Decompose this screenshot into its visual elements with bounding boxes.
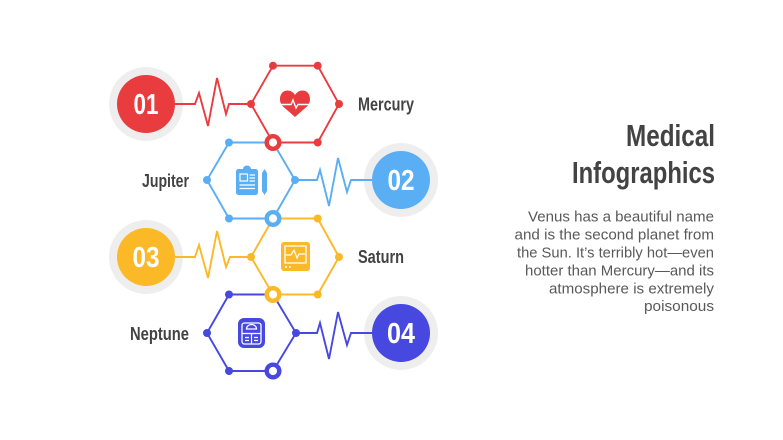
step 1: Mercury [109,62,414,149]
hexagon: Saturn [247,214,343,301]
body text: hotter than Mercury—and its [525,262,714,280]
icon: clipboard and pencil [236,166,267,195]
pulse line: Mercury [175,78,251,126]
title: Infographics [572,155,715,190]
pulse line: Neptune [296,312,372,359]
body text: and is the second planet from [514,226,714,244]
hexagon: Jupiter [203,138,299,225]
title [572,118,715,190]
number badge: 03: 03 [132,242,160,274]
label: Saturn: Saturn [358,247,404,267]
label: Mercury: Mercury [358,94,414,114]
step 4: Neptune [130,290,438,377]
body text: the Sun. It’s terribly hot—even [517,244,714,262]
hexagon: Neptune [203,290,300,377]
number badge: 02 [364,143,438,217]
number badge: 02: 02 [388,165,414,197]
number badge: 04: 04 [387,318,415,350]
step 3: Saturn [109,214,404,301]
number badge: 03 [109,220,183,294]
pulse line: Saturn [175,231,251,278]
label: Neptune: Neptune [130,324,189,344]
body text: Venus has a beautiful name [528,208,714,226]
icon: heart with pulse [280,90,310,117]
number badge: 01: 01 [134,89,158,121]
body text: poisonous [644,298,714,315]
icon: medical scale [238,318,265,348]
hexagon: Mercury [247,62,343,149]
number badge: 04 [364,296,438,370]
icon: monitor [281,242,310,271]
body text: atmosphere is extremely [549,280,714,298]
step 2: Jupiter [142,138,438,225]
pulse line: Jupiter [295,158,372,206]
title: Medical [626,118,715,153]
label: Jupiter: Jupiter [142,171,189,191]
body text [514,208,714,315]
number badge: 01 [109,67,183,141]
